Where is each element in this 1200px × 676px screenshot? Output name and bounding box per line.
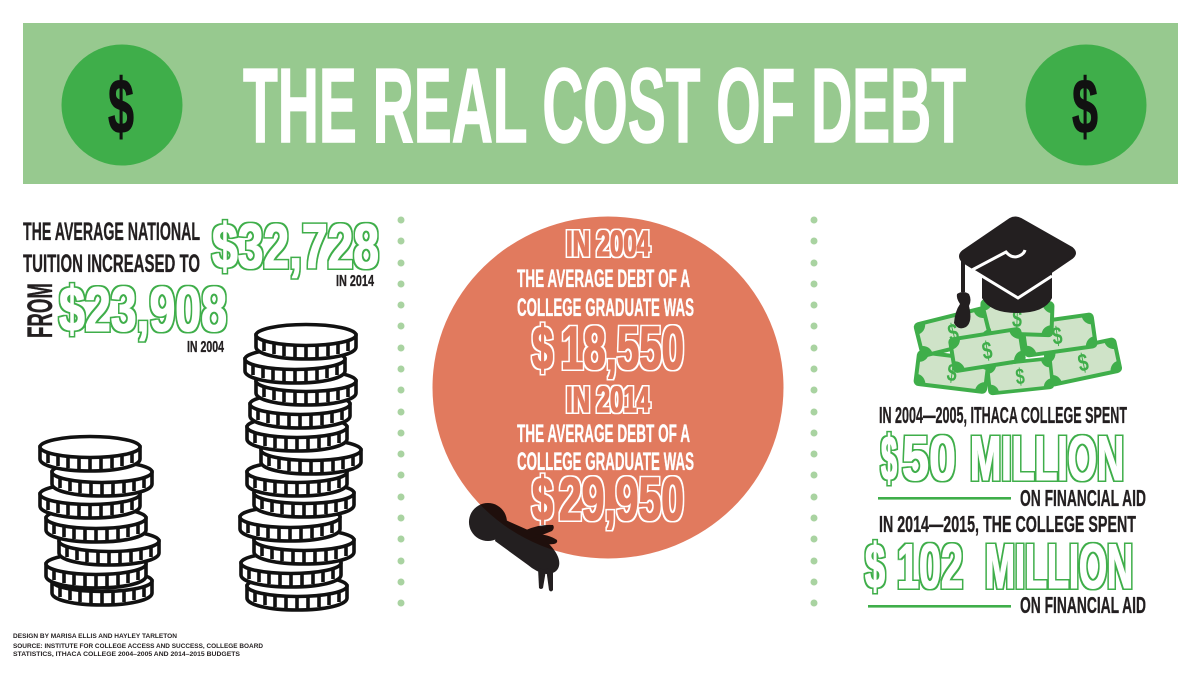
- figure: 29,950 debt: 29,950: [559, 465, 684, 533]
- bill: [904, 341, 1000, 403]
- figure: 29,950 debt: $: [532, 465, 553, 533]
- figure: 29,950 debt: [532, 465, 684, 533]
- figure: 102 million: 102: [897, 532, 963, 602]
- label: from: FROM: [21, 283, 60, 338]
- icon: tall coin stack: [240, 324, 361, 610]
- label: in 2014: IN 2014: [566, 379, 650, 420]
- figure: 18,550 debt: [532, 314, 684, 382]
- debt circle: [432, 216, 784, 558]
- icon: graduation cap: [954, 218, 1075, 328]
- icon: left dollar coin: $: [108, 62, 134, 150]
- debt text 2004: THE AVERAGE DEBT OF A: [517, 265, 690, 293]
- bill: [903, 296, 1003, 368]
- bill: [971, 290, 1063, 346]
- figure: 18,550 debt: $: [532, 314, 553, 382]
- credits and sources: SOURCE: INSTITUTE FOR COLLEGE ACCESS AND SUCCESS, COLLEGE BOARD: [13, 643, 263, 650]
- figure: 102 million: $: [865, 532, 885, 602]
- figure: 50 million: 50: [902, 424, 956, 494]
- bill: $: [945, 318, 962, 348]
- tuition intro text: [23, 218, 200, 278]
- bill: [1011, 303, 1107, 367]
- bill: $: [1075, 348, 1091, 378]
- debt text 2004: [517, 265, 694, 322]
- icon: left dollar coin: [62, 44, 182, 166]
- bill: $: [1011, 305, 1023, 333]
- debt text 2014: COLLEGE GRADUATE WAS: [517, 448, 694, 476]
- figure: 50 million: $: [881, 424, 897, 494]
- panel: graduate debt circle: [432, 216, 784, 592]
- bill: $: [1014, 364, 1026, 389]
- debt text 2014: [517, 420, 694, 476]
- header banner: [23, 23, 1178, 184]
- label: in 2004: IN 2004: [187, 339, 224, 356]
- panel: financial aid: [865, 218, 1146, 618]
- debt text 2004: COLLEGE GRADUATE WAS: [517, 294, 694, 322]
- tuition intro text: THE AVERAGE NATIONAL: [23, 218, 200, 246]
- bill: [938, 317, 1036, 383]
- credits and sources: [13, 633, 263, 658]
- bill: $: [945, 358, 959, 388]
- figure: 102 million: [865, 532, 1133, 602]
- figure: 50 million: [881, 424, 1124, 494]
- label: in 2014: IN 2014: [336, 273, 374, 290]
- icon: stack of dollar bills: [903, 290, 1132, 404]
- panel: tuition: [21, 212, 379, 610]
- figure: 18,550 debt: 18,550: [561, 314, 684, 382]
- icon: person slumped over circle: [469, 503, 559, 592]
- credits and sources: DESIGN BY MARISA ELLIS AND HAYLEY TARLETON: [13, 633, 177, 640]
- bill: $: [980, 336, 994, 366]
- figure: 23,908 tuition: $23,908: [59, 275, 227, 345]
- label: in 2004: IN 2004: [566, 223, 650, 264]
- bill: [1034, 327, 1132, 397]
- icon: short coin stack: [40, 436, 159, 605]
- debt text 2014: THE AVERAGE DEBT OF A: [517, 420, 690, 448]
- figure: 32,728 tuition: $32,728: [212, 212, 379, 282]
- bill: [977, 348, 1063, 404]
- tuition intro text: TUITION INCREASED TO: [23, 250, 200, 278]
- icon: right dollar coin: $: [1072, 62, 1098, 150]
- credits and sources: STATISTICS, ITHACA COLLEGE 2004–2005 AND 2014–2015 BUDGETS: [13, 651, 241, 658]
- bill: $: [1050, 322, 1064, 351]
- icon: right dollar coin: [1026, 44, 1146, 166]
